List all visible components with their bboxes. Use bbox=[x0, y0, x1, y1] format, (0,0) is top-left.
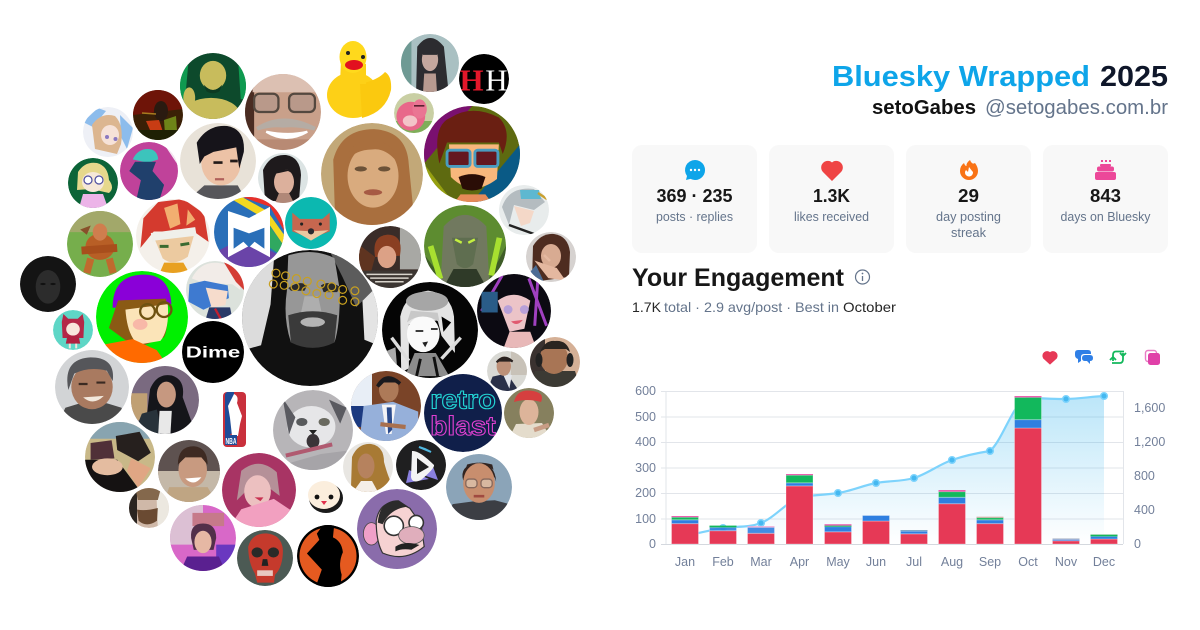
panel: day posting streak: day posting bbox=[936, 209, 1001, 224]
avatar: man in light blue suit bbox=[351, 371, 421, 441]
user name and handle: setoGabes bbox=[872, 97, 976, 119]
left axis labels bbox=[635, 384, 656, 551]
avatar: HH logo bbox=[459, 54, 509, 104]
month labels: Jan bbox=[675, 555, 695, 569]
month labels: Sep bbox=[979, 555, 1001, 569]
avatar: blonde character with glasses bbox=[68, 158, 118, 208]
bar: Jun bbox=[862, 516, 890, 544]
avatar: movie still with caption bbox=[359, 226, 421, 288]
avatar: black-haired young man bbox=[180, 123, 256, 199]
avatar: white-haired anime character bbox=[499, 185, 549, 235]
avatar: rainbow M shield bbox=[214, 197, 284, 267]
icon: legend replies bbox=[1075, 350, 1093, 364]
avatar: pink and purple anime girl bbox=[477, 274, 551, 348]
engagement chart bbox=[635, 384, 1165, 569]
panel: likes received: 1.3K bbox=[813, 185, 851, 206]
icon: cake bbox=[1095, 160, 1116, 180]
avatar: bearded man close-up bbox=[129, 488, 169, 528]
bar: Jan bbox=[672, 516, 698, 544]
avatar: Dime logo: Dime bbox=[186, 344, 240, 362]
avatar: NBA logo: NBA bbox=[226, 437, 237, 446]
month labels: Dec bbox=[1093, 555, 1115, 569]
month labels: Nov bbox=[1055, 555, 1078, 569]
grid lines bbox=[661, 391, 1124, 544]
avatar: blue silhouette on magenta bbox=[120, 142, 178, 200]
avatar: purple cartoon man bbox=[357, 489, 437, 569]
avatar: HH logo: H bbox=[485, 62, 508, 98]
engagement summary: total · 2.9 avg/post · Best in bbox=[664, 299, 839, 315]
avatar: bao bun bbox=[308, 481, 343, 513]
avatar: pink pokemon bbox=[394, 93, 434, 133]
month labels: Feb bbox=[712, 555, 734, 569]
month labels: Jun bbox=[866, 555, 886, 569]
avatar: retro blast logo bbox=[424, 374, 502, 452]
avatar: balding man with glasses bbox=[446, 454, 512, 520]
month labels: Oct bbox=[1018, 555, 1038, 569]
engagement summary bbox=[632, 299, 896, 315]
avatar: dark red photo bbox=[133, 90, 183, 140]
month labels: May bbox=[826, 555, 851, 569]
avatar: dark shadowy portrait bbox=[20, 256, 76, 312]
bar: Feb bbox=[710, 526, 736, 544]
left axis labels: 400 bbox=[635, 435, 656, 449]
month labels: Apr bbox=[790, 555, 809, 569]
icon: info bbox=[856, 270, 870, 284]
avatar: long-haired person bbox=[131, 366, 199, 434]
avatar: rubber duck bbox=[327, 41, 391, 118]
avatar: green elf bbox=[424, 205, 506, 287]
heading: your engagement: Your Engagement bbox=[632, 264, 845, 292]
avatar: pink-haired girl bbox=[222, 453, 296, 527]
left axis labels: 300 bbox=[635, 461, 656, 475]
avatar: girl framing face with hands bbox=[526, 232, 576, 282]
bar: Nov bbox=[1052, 538, 1080, 544]
panel: day posting streak: 29 bbox=[958, 185, 979, 206]
avatar cloud bbox=[20, 34, 580, 587]
icon: legend quote bbox=[1146, 350, 1160, 365]
right axis labels bbox=[1134, 401, 1165, 551]
avatar: woman with long blonde hair bbox=[343, 442, 393, 492]
month labels: Mar bbox=[750, 555, 772, 569]
icon: legend heart bbox=[1043, 352, 1057, 364]
bar: May bbox=[824, 524, 852, 544]
avatar: NBA logo bbox=[223, 392, 246, 447]
avatar: anime chibi on teal bbox=[53, 310, 93, 350]
icon: speech bubble bbox=[685, 160, 705, 180]
avatar: green and yellow illustrated man bbox=[180, 53, 246, 119]
avatar: laughing young man bbox=[158, 440, 220, 502]
icon: heart bbox=[822, 162, 842, 180]
right axis labels: 1,200 bbox=[1134, 435, 1165, 449]
avatar: cartoon man with blue sunglasses bbox=[424, 106, 520, 202]
avatar: red skull bbox=[237, 530, 293, 586]
icon: flame bbox=[960, 160, 978, 180]
panel: days on Bluesky bbox=[1043, 145, 1168, 253]
avatar: retro blast logo: blast bbox=[430, 411, 496, 441]
left axis labels: 100 bbox=[635, 512, 656, 526]
avatar: older man with glasses and moustache bbox=[245, 74, 321, 150]
avatar: man in suit, selfie bbox=[487, 351, 527, 391]
avatar: person with black cat bbox=[85, 422, 155, 492]
avatar: orangutan bbox=[67, 211, 133, 277]
panel: posts and replies bbox=[632, 145, 757, 253]
avatar: grey cat with wig bbox=[273, 390, 353, 470]
avatar: man with headphones bbox=[530, 337, 580, 387]
panel: day posting streak bbox=[906, 145, 1031, 253]
cumulative line bbox=[685, 393, 1107, 535]
bar: Dec bbox=[1090, 534, 1118, 544]
avatar: black and white manga girl bbox=[382, 282, 478, 378]
avatar: retro blast logo: retro bbox=[430, 384, 496, 414]
icon: legend repost bbox=[1110, 352, 1126, 363]
bar: Oct bbox=[1014, 396, 1042, 544]
right axis labels: 400 bbox=[1134, 503, 1155, 517]
left axis labels: 600 bbox=[635, 384, 656, 398]
avatar: teal fox bbox=[285, 197, 337, 249]
right axis labels: 1,600 bbox=[1134, 401, 1165, 415]
month labels bbox=[675, 555, 1115, 569]
avatar: smiling man bbox=[55, 350, 129, 424]
right axis labels: 800 bbox=[1134, 469, 1155, 483]
chart legend bbox=[1043, 350, 1160, 365]
panel: days on Bluesky: days on Bluesky bbox=[1060, 209, 1151, 224]
avatar: play button logo bbox=[396, 440, 446, 490]
avatar: woman with auburn hair bbox=[321, 123, 423, 225]
left axis labels: 200 bbox=[635, 486, 656, 500]
avatar: orange silhouette logo bbox=[297, 525, 359, 587]
avatar: dark-haired woman bbox=[258, 153, 308, 203]
stacked bars bbox=[672, 396, 1118, 544]
panel: posts and replies: 369 · 235 bbox=[656, 185, 732, 206]
title: Bluesky Wrapped bbox=[832, 61, 1090, 93]
panel: likes received bbox=[769, 145, 894, 253]
avatar: bearded man in black and white bbox=[242, 250, 378, 386]
left axis labels: 500 bbox=[635, 410, 656, 424]
panel: days on Bluesky: 843 bbox=[1090, 185, 1121, 206]
left axis labels: 0 bbox=[649, 537, 656, 551]
cumulative area bbox=[685, 396, 1104, 544]
user name and handle bbox=[872, 97, 1168, 119]
title: 2025 bbox=[1100, 61, 1168, 93]
panel: likes received: likes received bbox=[794, 209, 869, 224]
engagement summary: 1.7K bbox=[632, 299, 662, 315]
bar: Jul bbox=[900, 530, 928, 544]
avatar: woman in pink room bbox=[170, 505, 236, 571]
avatar: man in red cap bbox=[504, 388, 554, 438]
avatar: anime boy in santa hat bbox=[186, 261, 244, 319]
bar: Mar bbox=[748, 526, 774, 544]
avatar: purple beanie cartoon on green bbox=[96, 271, 188, 363]
avatar: Dime logo bbox=[182, 321, 244, 383]
bar: Aug bbox=[938, 490, 966, 544]
right axis labels: 0 bbox=[1134, 537, 1141, 551]
month labels: Aug bbox=[941, 555, 963, 569]
bar: Apr bbox=[786, 474, 813, 544]
panel: posts and replies: posts · replies bbox=[656, 209, 733, 224]
avatar: red-haired anime hero bbox=[136, 199, 210, 273]
bar: Sep bbox=[976, 517, 1004, 544]
avatar: pastel anime girl bbox=[83, 107, 133, 157]
avatar: woman with dark hair bbox=[401, 34, 459, 92]
engagement summary: October bbox=[843, 299, 896, 315]
month labels: Jul bbox=[906, 555, 922, 569]
user name and handle: @setogabes.com.br bbox=[985, 97, 1168, 119]
avatar: HH logo: H bbox=[459, 62, 484, 98]
panel: day posting streak: streak bbox=[951, 225, 986, 240]
